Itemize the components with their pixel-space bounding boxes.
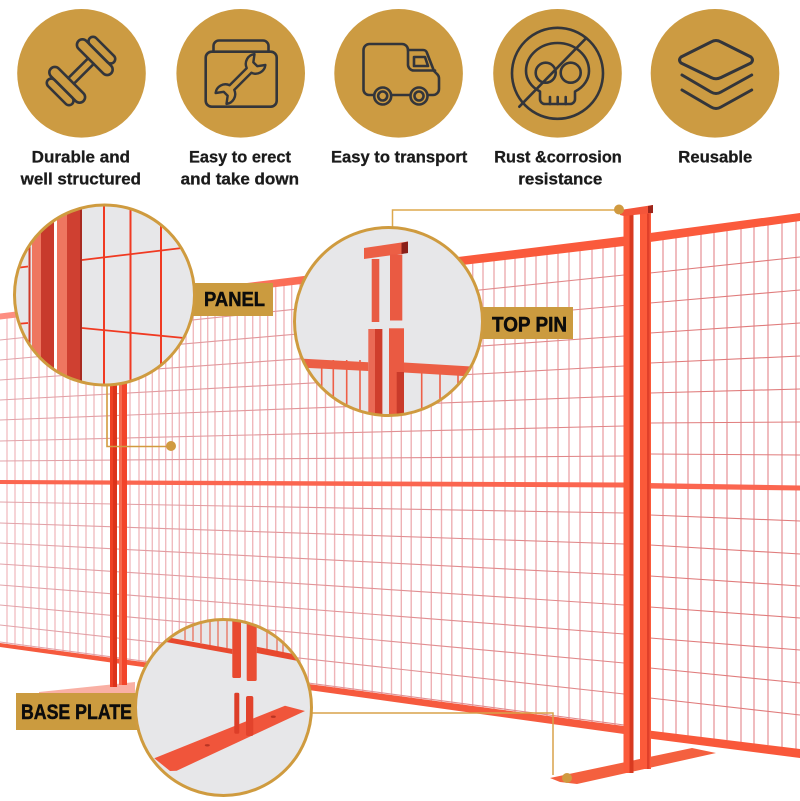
magnifier: panel detail [14, 200, 194, 390]
icon: crossed-out skull [512, 28, 603, 119]
fence: centre base plate [550, 748, 716, 784]
caption: erect [181, 149, 299, 188]
badge: easy to transport [334, 9, 463, 138]
magnifier: base plate detail [136, 615, 312, 796]
gold leader line: panel [107, 384, 176, 451]
badge: easy to erect and take down [176, 9, 305, 138]
fence: left base plate [39, 682, 135, 696]
fence: wire horizontals, right panel [650, 257, 800, 715]
fence: right panel rails [645, 213, 800, 758]
magnifier: top pin detail [290, 228, 482, 420]
fence: centre post pair with top pin [620, 205, 653, 773]
caption: durable [20, 149, 141, 188]
caption: rust: Rust &corrosion [494, 149, 622, 167]
badge: durable and well structured [17, 9, 146, 138]
gold leader line: top pin [392, 204, 624, 228]
fence: main panel rails [0, 236, 624, 734]
label: BASE PLATE [16, 693, 140, 730]
badge: rust and corrosion resistance [493, 9, 622, 138]
icon: toolbox with wrench [206, 40, 277, 107]
caption: erect: Easy to erect [189, 149, 291, 167]
icon: truck [364, 44, 439, 104]
caption: transport: Easy to transport [331, 149, 468, 167]
badge: reusable [651, 9, 779, 138]
caption: reusable: Reusable [678, 149, 752, 167]
label: BASE PLATE: BASE PLATE [21, 701, 132, 724]
caption: rust [494, 149, 622, 188]
label: PANEL [190, 283, 273, 316]
label: TOP PIN [478, 307, 573, 339]
icon: stacked layers [680, 40, 752, 108]
label: TOP PIN: TOP PIN [492, 314, 567, 336]
label: PANEL: PANEL [204, 289, 265, 311]
caption: rust: resistance [518, 170, 602, 188]
caption: durable: Durable and [32, 149, 130, 167]
fence: wire mesh horizontals, left and main panels [0, 275, 624, 725]
gold leader line: base plate [310, 713, 572, 783]
caption: erect: and take down [181, 170, 299, 188]
fence illustration [0, 205, 800, 784]
fence: wire mesh, right panel [663, 221, 796, 748]
fence: wire mesh verticals, left and main panels [7, 239, 615, 731]
icon: dumbbell [41, 31, 121, 111]
caption: durable: well structured [20, 170, 141, 188]
fence: left post pair [110, 380, 127, 687]
